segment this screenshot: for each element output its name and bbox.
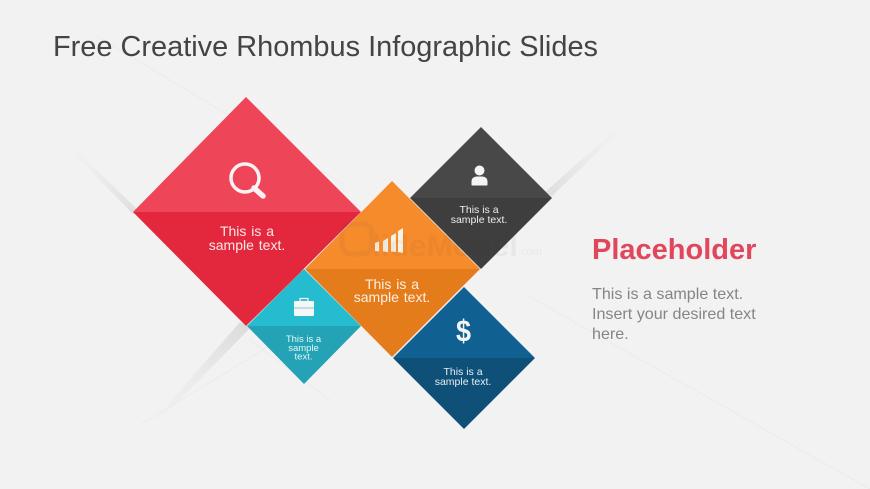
text: orange rhombus label: This is a	[365, 276, 419, 292]
text: blue rhombus label: sample text.	[435, 376, 491, 388]
text: teal rhombus label: text.	[295, 352, 312, 362]
heading: placeholder: Placeholder	[592, 234, 756, 266]
text: teal rhombus label: sample	[288, 343, 319, 354]
text: teal rhombus label: This is a	[286, 334, 321, 345]
panel: dark rhombus	[410, 127, 552, 269]
watermark: .com	[518, 246, 542, 258]
text: dark rhombus label: This is a	[459, 204, 499, 216]
title: Free Creative Rhombus Infographic Slides	[53, 31, 598, 63]
icon: briefcase	[294, 298, 314, 316]
panel: blue rhombus	[393, 287, 535, 429]
panel: red rhombus	[133, 97, 361, 326]
text: blue rhombus label: This is a	[443, 366, 483, 378]
icon: person	[472, 166, 488, 186]
panel: teal rhombus	[247, 269, 361, 384]
panel: orange rhombus	[305, 181, 480, 357]
text: dark rhombus label: sample text.	[451, 214, 507, 226]
watermark: lideModel	[372, 228, 518, 263]
watermark	[342, 224, 542, 263]
text: orange rhombus label: sample text.	[354, 289, 430, 305]
icon: magnifying glass	[231, 164, 263, 196]
text: red rhombus label: This is a	[220, 223, 274, 239]
icon: dollar sign: $	[456, 313, 471, 348]
text: red rhombus label: sample text.	[209, 237, 285, 253]
text block: description: Insert your desired text	[592, 305, 756, 323]
icon: bar chart	[375, 228, 403, 253]
text block: description: here.	[592, 325, 629, 343]
text block: description: This is a sample text.	[592, 285, 743, 303]
